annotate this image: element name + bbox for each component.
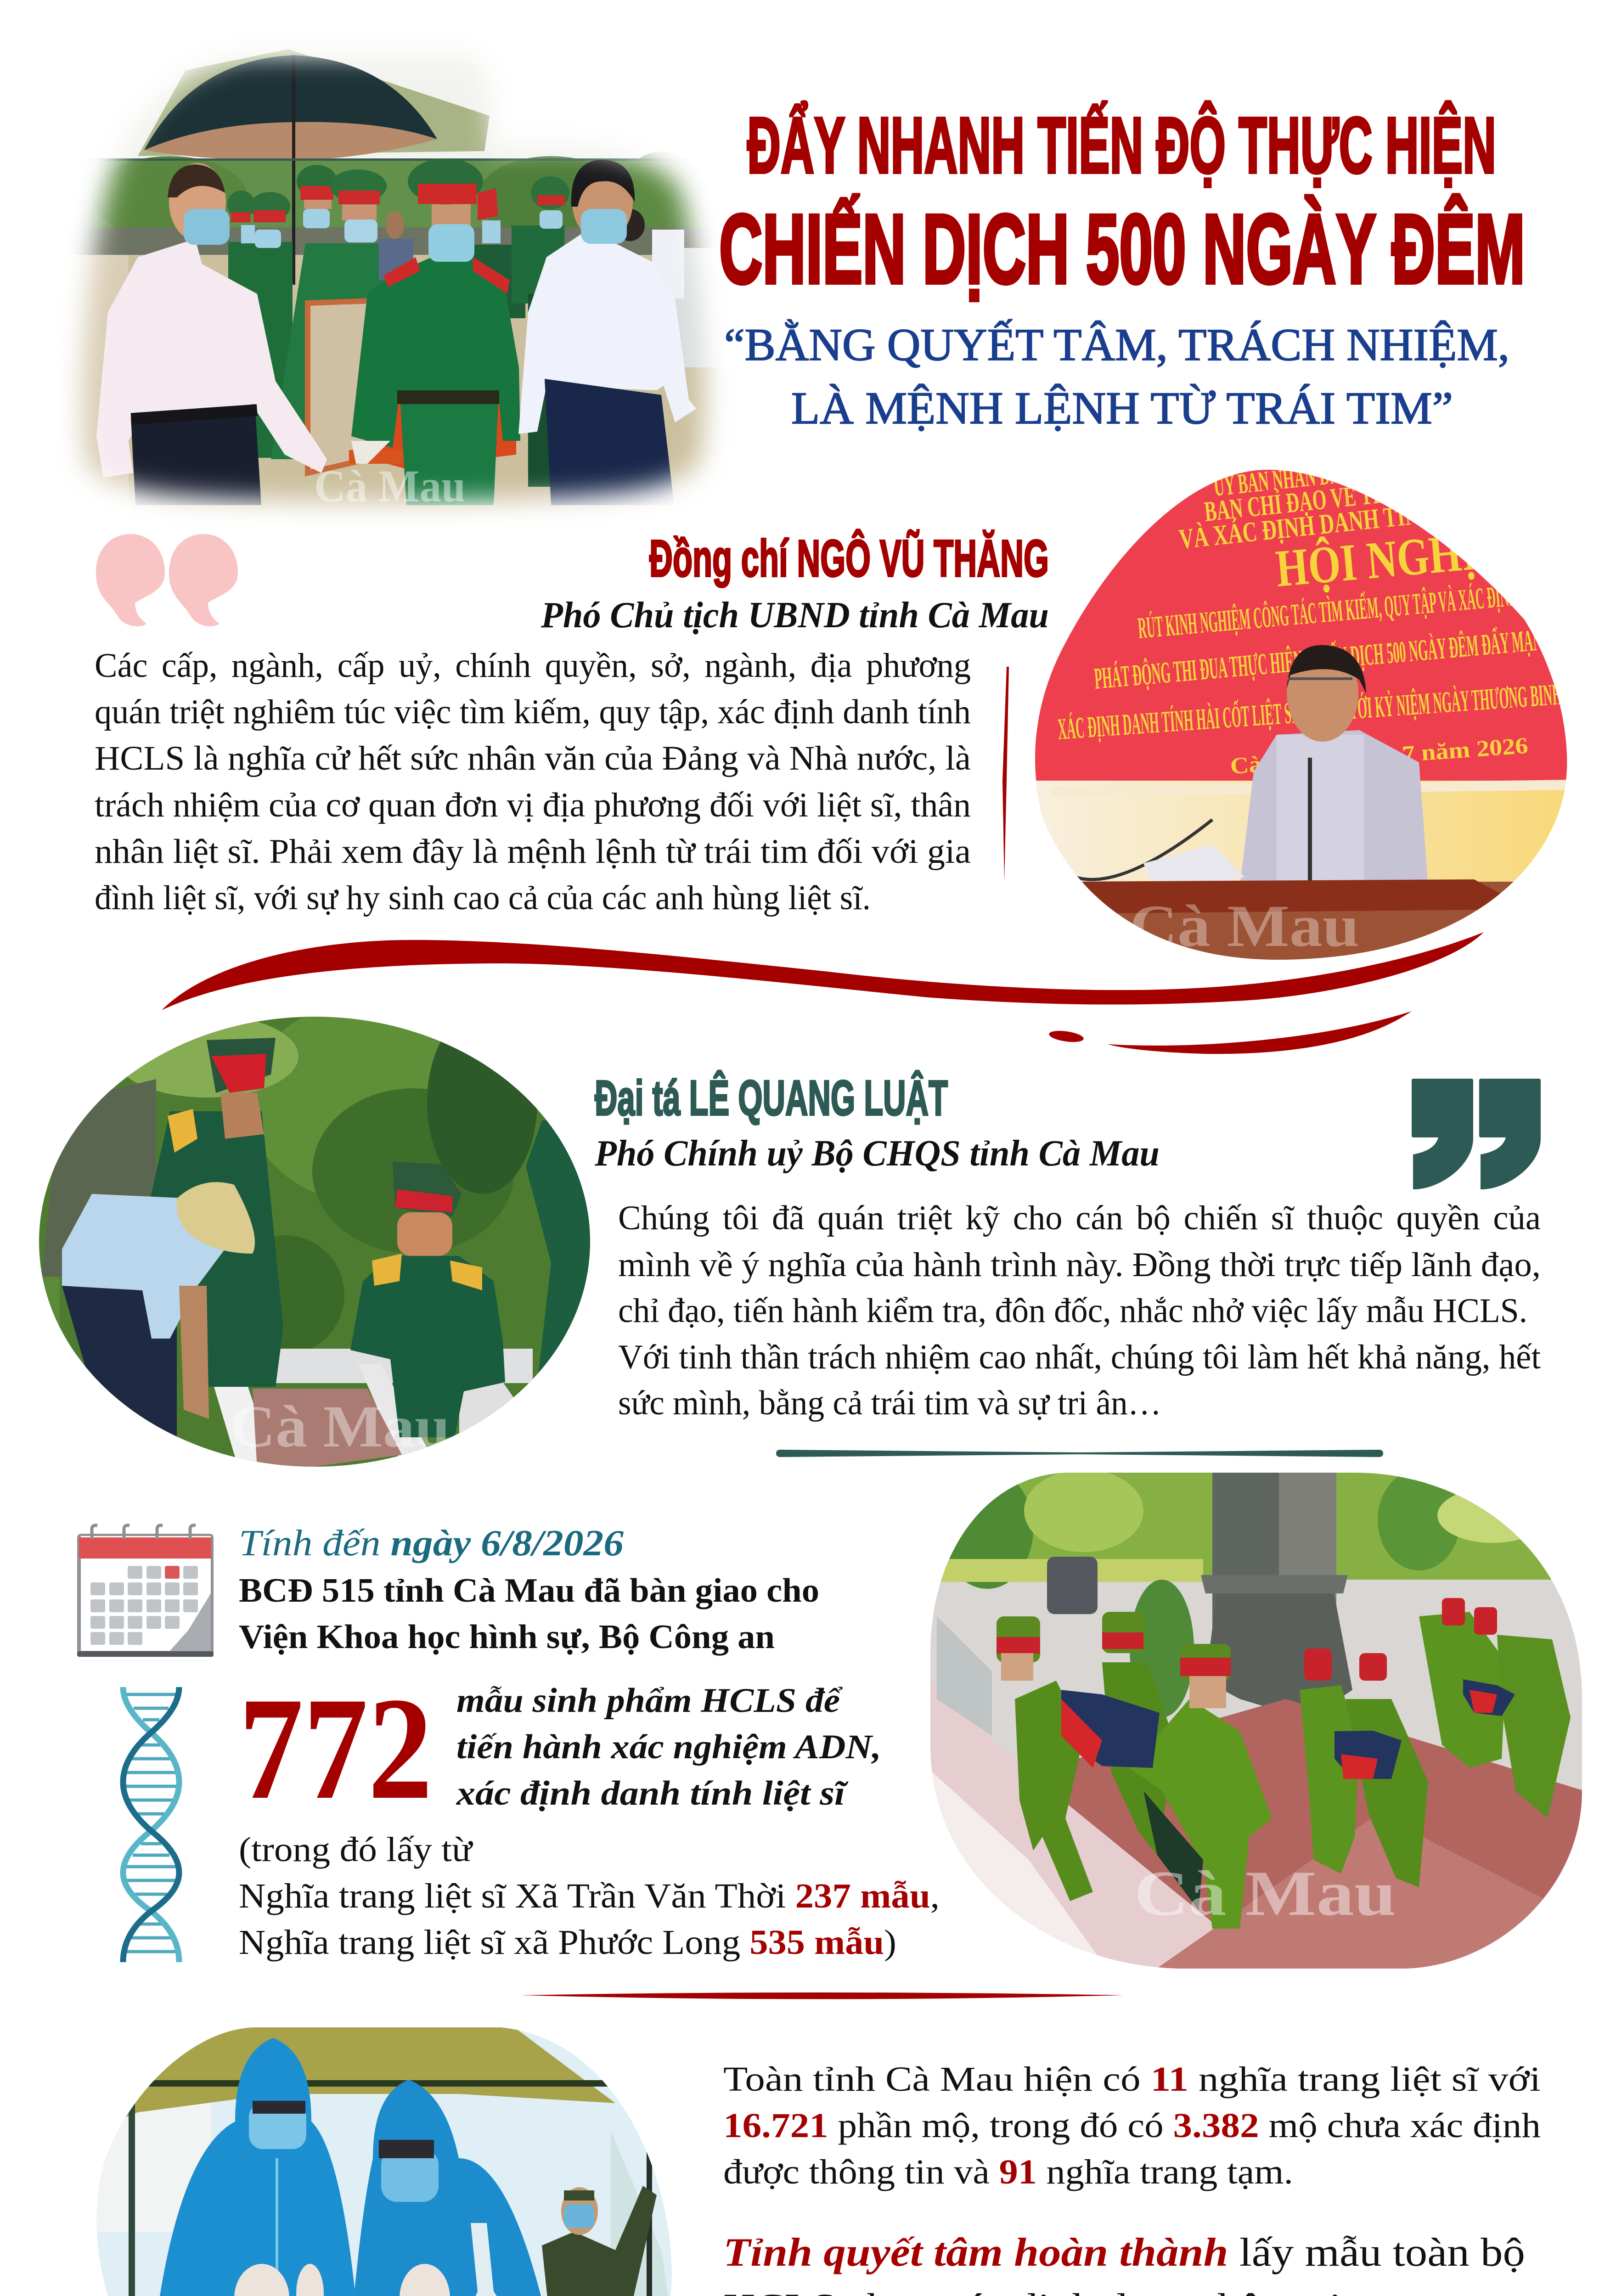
red divider [520,1992,1123,1999]
sub: soldier in background [542,2186,657,2296]
sample sources: (trong đó lấy từ [239,1830,473,1869]
teal divider [776,1450,1383,1457]
sub: banner text: Cà Mau, tháng 7 năm 2026 [1229,732,1529,779]
sample sources [239,1830,940,1962]
sub: soldiers behind [227,165,684,487]
sub: man left [96,163,327,505]
photo: technicians in blue coveralls [92,2025,680,2296]
sub: second police group [1300,1598,1571,1887]
icon: teal DNA helix [123,1687,179,1962]
quote 1 text: đình liệt sĩ, với sự hy sinh cao cả của các anh hùng liệt sĩ. [95,879,871,917]
sub: soldier at right [526,1120,592,1382]
sample sources: Nghĩa trang liệt sĩ Xã Trần Văn Thời 237 mẫu, [239,1877,940,1915]
sub: speaker [1240,645,1428,886]
sub: banner text: ỦY BAN NHÂN DÂN [1212,457,1352,502]
determination text: Tỉnh quyết tâm hoàn thành lấy mẫu toàn bộ [723,2230,1525,2275]
subtitle line 1: “BẰNG QUYẾT TÂM, TRÁCH NHIỆM, [724,319,1509,370]
photo: officers inspecting graves [37,1001,597,1469]
quote 2 text: chỉ đạo, tiến hành kiểm tra, đôn đốc, nhắc nhở việc lấy mẫu HCLS. [618,1292,1527,1330]
icon: calendar [77,1525,214,1657]
samples description: tiến hành xác nghiệm ADN, [456,1728,881,1766]
quote 1 text [95,647,971,917]
quote 1 text: trách nhiệm của cơ quan đơn vị địa phương đối với liệt sĩ, thân [95,786,971,824]
photo: officials and soldiers under umbrella [67,49,721,518]
photo: speaker at podium [1029,457,1575,964]
sub: banner text: BAN CHỈ ĐẠO VỀ TÌM [1203,476,1398,528]
watermark: Cà Mau [314,461,466,512]
sub: technician left [160,2038,367,2296]
sample sources: Nghĩa trang liệt sĩ xã Phước Long 535 mẫu) [239,1923,896,1962]
red vertical rule [1002,667,1009,882]
quote 2 text: Với tinh thần trách nhiệm cao nhất, chúng tôi làm hết khả năng, hết [618,1338,1541,1376]
handover text [239,1572,819,1656]
quote 2 text: Chúng tôi đã quán triệt kỹ cho cán bộ chiến sĩ thuộc quyền của [618,1199,1541,1237]
speaker 2 name: Đại tá LÊ QUANG LUẬT [595,1070,948,1125]
samples description: xác định danh tính liệt sĩ [456,1774,849,1812]
sub: stairs and tile [928,1681,1277,1975]
sub: main police group [997,1612,1272,1929]
sub: seated officer [350,1162,505,1437]
quote 1 text: nhân liệt sĩ. Phải xem đây là mệnh lệnh từ trái tim đối với gia [95,833,971,871]
speaker 1 name: Đồng chí NGÔ VŨ THĂNG [649,529,1049,587]
subtitle line 2: LÀ MỆNH LỆNH TỪ TRÁI TIM” [791,383,1453,433]
big number 772: 772 [239,1667,433,1830]
photo: police carrying boxes [928,1469,1584,1975]
sub: man with straw hat [62,1182,255,1437]
quote 1 text: quán triệt nghiêm túc việc tìm kiếm, quy tập, xác định danh tính [95,693,971,731]
cemetery statistics text: Toàn tỉnh Cà Mau hiện có 11 nghĩa trang liệt sĩ với [723,2060,1541,2099]
cemetery statistics text: 16.721 phần mộ, trong đó có 3.382 mộ chưa xác định [723,2106,1541,2145]
icon: dark teal quotation mark [1412,1079,1541,1189]
sub: glass case [308,301,516,473]
photo: police carrying boxes: Cà Mau [1134,1858,1396,1929]
sub: standing officer [149,1038,283,1387]
samples description [456,1682,881,1812]
handover text: BCĐ 515 tỉnh Cà Mau đã bàn giao cho [239,1572,819,1609]
cemetery statistics text [723,2060,1541,2191]
sub: soldier centre [351,158,520,505]
quote 2 text [618,1199,1541,1422]
quote 1 text: Các cấp, ngành, cấp uỷ, chính quyền, sở, ngành, địa phương [95,647,971,685]
cemetery statistics text: được thông tin và 91 nghĩa trang tạm. [723,2153,1293,2191]
photo: speaker at podium: Cà Mau [1130,893,1359,959]
title [719,101,1525,433]
determination text [723,2230,1525,2296]
samples description: mẫu sinh phẩm HCLS để [456,1682,843,1720]
sub: podium [1029,882,1575,964]
speaker 1 role: Phó Chủ tịch UBND tỉnh Cà Mau [541,595,1049,636]
sub: banner text: VÀ XÁC ĐỊNH DANH TÍNH [1177,497,1436,555]
sub: technician right [354,2080,542,2296]
sub: table and items [92,2223,680,2296]
date line: Tính đến ngày 6/8/2026 [239,1523,624,1564]
handover text: Viện Khoa học hình sự, Bộ Công an [239,1618,775,1656]
icon: pink quotation mark [96,534,238,626]
speaker 2 role: Phó Chính uỷ Bộ CHQS tỉnh Cà Mau [594,1133,1160,1174]
sub: pillar [1201,1473,1352,1720]
sub: banner text: HỘI NGHỊ [1273,522,1480,598]
quote 2 text: sức mình, bằng cả trái tim và sự tri ân… [618,1384,1161,1422]
quote 1 text: HCLS là nghĩa cử hết sức nhân văn của Đảng và Nhà nước, là [95,739,971,777]
photo: officers inspecting graves: Cà Mau [230,1394,450,1460]
sub: man right [518,160,696,505]
sub: banner text [1057,457,1563,779]
quote 2 text: mình về ý nghĩa của hành trình này. Đồng thời trực tiếp lãnh đạo, [618,1246,1541,1284]
decorative red swoosh [162,932,1484,1054]
sub: microphone [1064,820,1212,879]
sub: white grave blocks [96,1349,533,1469]
